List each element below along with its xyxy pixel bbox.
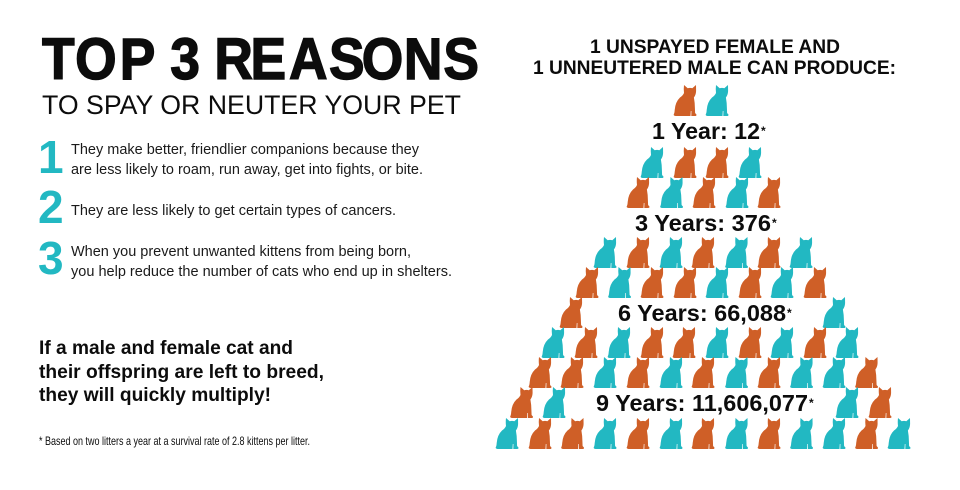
reason 2: [38, 181, 396, 233]
footnote: * Based on two litters a year at a survival rate of 2.8 kittens per litter.: [39, 434, 310, 448]
label: 9 years: *: [809, 396, 814, 410]
reasons list: [38, 131, 452, 284]
cats row 8: [529, 357, 878, 388]
cats row 2: [641, 147, 762, 178]
reason 1 text: are less likely to roam, run away, get into fights, or bite.: [71, 162, 423, 178]
pyramid heading: 1 UNNEUTERED MALE CAN PRODUCE:: [533, 58, 896, 79]
pyramid heading: [533, 37, 896, 79]
callout: cats multiply: they will quickly multiply!: [39, 385, 271, 406]
cat pyramid: [496, 85, 911, 449]
callout: cats multiply: [39, 338, 324, 406]
cats row 4: [594, 237, 813, 268]
label: 6 years: *: [787, 306, 792, 320]
title line: top 3 reasons: TOP 3 REASONS: [42, 27, 479, 91]
pyramid heading: 1 UNSPAYED FEMALE AND: [590, 37, 840, 58]
cats row 5: [576, 267, 827, 298]
label: 1 year: *: [761, 124, 766, 138]
label: 6 years: 6 Years: 66,088: [618, 300, 786, 326]
label: 3 years: 3 Years: 376: [635, 210, 771, 236]
number 2: 2: [38, 181, 64, 233]
cats row 6: [560, 297, 846, 328]
label: 1 year: 1 Year: 12: [652, 118, 760, 144]
reason 3 text: [71, 244, 452, 280]
reason 2 text: They are less likely to get certain types of cancers.: [71, 203, 396, 219]
title: [42, 27, 479, 120]
callout: cats multiply: their offspring are left to breed,: [39, 362, 324, 383]
reason 3 text: When you prevent unwanted kittens from being born,: [71, 244, 411, 260]
reason 1: [38, 131, 423, 183]
reason 3: [38, 232, 452, 284]
cats row 10: [496, 418, 911, 449]
cats row 7: [542, 327, 859, 358]
number 3: 3: [38, 232, 64, 284]
cats row 3: [627, 177, 781, 208]
callout: cats multiply: If a male and female cat and: [39, 338, 293, 359]
cats row 1: [674, 85, 729, 116]
subtitle: TO SPAY OR NEUTER YOUR PET: [42, 90, 461, 120]
number 1: 1: [38, 131, 64, 183]
cats row 9: [510, 387, 892, 418]
reason 3 text: you help reduce the number of cats who end up in shelters.: [71, 264, 452, 280]
reason 1 text: [71, 142, 423, 178]
reason 1 text: They make better, friendlier companions because they: [71, 142, 420, 158]
label: 3 years: *: [772, 216, 777, 230]
label: 9 years: 9 Years: 11,606,077: [596, 390, 808, 416]
